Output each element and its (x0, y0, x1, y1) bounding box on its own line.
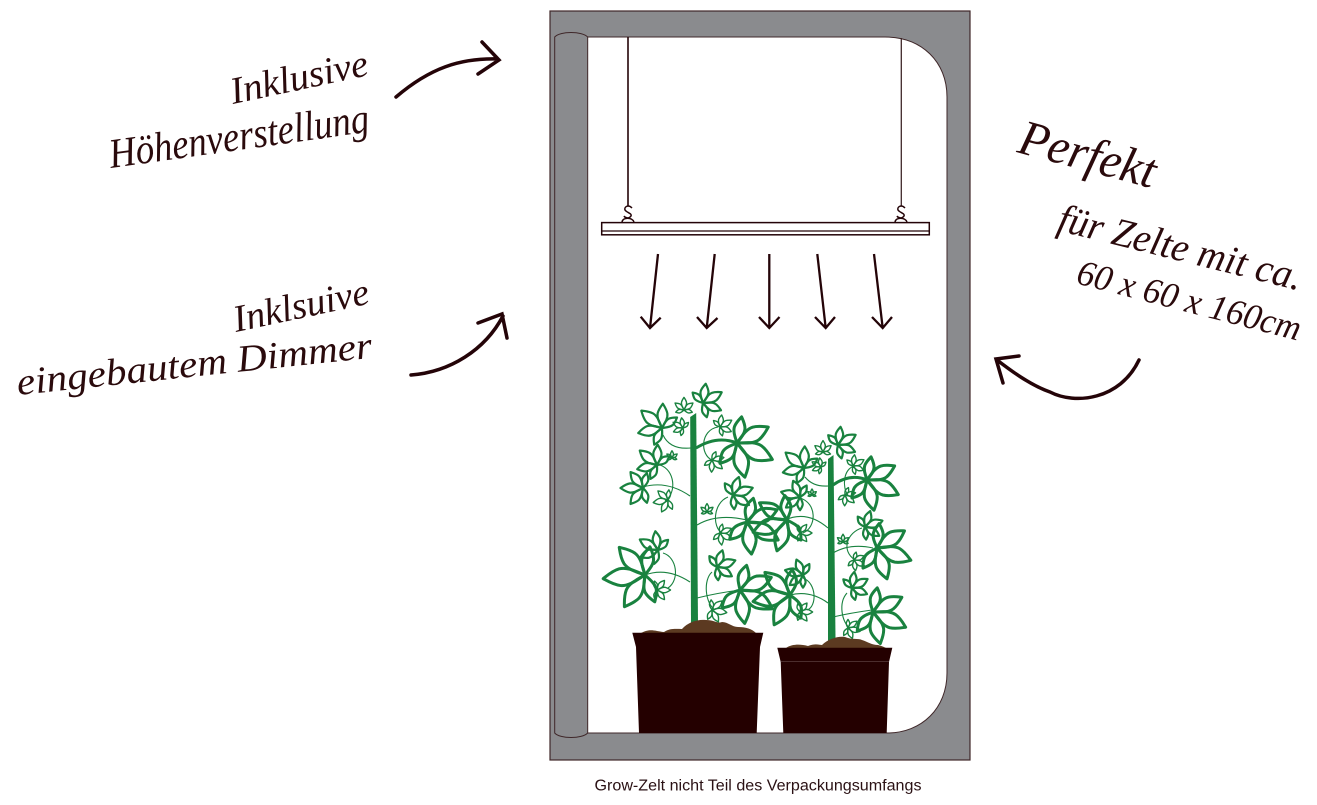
light arrows (641, 254, 892, 328)
plant right leaves (743, 420, 921, 654)
arrow to tent side (996, 356, 1139, 398)
left hook (622, 206, 634, 222)
arrow to tent top (396, 42, 499, 97)
callout: dimmer (15, 271, 507, 404)
callout text line 2: Höhenverstellung (105, 96, 372, 178)
plant right branches (785, 466, 873, 628)
light arrow 2 (697, 254, 718, 328)
light arrow 4 (815, 254, 835, 328)
callout text line 1: Inklsuive (228, 271, 373, 341)
callout text line 1: Perfekt (1012, 108, 1164, 199)
light arrow 1 (641, 254, 661, 328)
rolled door (555, 32, 588, 738)
callout text line 1: Inklusive (225, 43, 372, 113)
lamp bar inner line (602, 230, 929, 232)
pot right (777, 648, 892, 733)
right cable (900, 38, 902, 206)
pots with soil (632, 620, 892, 733)
LED lamp with cables (602, 37, 929, 235)
callout text line 2: eingebautem Dimmer (15, 325, 374, 404)
soil left (641, 620, 756, 633)
soil right (786, 637, 886, 648)
plant left leaves (600, 377, 793, 635)
caption: Grow-Zelt nicht Teil des Verpackungsumfangs (594, 778, 922, 794)
right hook (895, 206, 907, 222)
plant right (743, 420, 921, 654)
pot left (632, 633, 763, 733)
light arrow 3 (759, 254, 780, 328)
light arrow 5 (872, 254, 892, 328)
callout text line 3: 60 x 60 x 160cm (1073, 252, 1306, 348)
callout: height adjustment (105, 42, 499, 178)
tent frame (550, 11, 970, 760)
callout text line 2: für Zelte mit ca. (1054, 195, 1307, 299)
callout: tent size (996, 108, 1307, 398)
plant right stem (828, 455, 836, 643)
plant left (600, 377, 793, 635)
plant left stem (690, 413, 698, 627)
plant left branches (643, 427, 747, 610)
tent (550, 11, 970, 760)
lamp bar (602, 223, 929, 235)
pot right rim line (781, 660, 889, 662)
arrow to lamp (411, 314, 507, 375)
left cable (627, 37, 629, 206)
tent interior (588, 37, 947, 733)
